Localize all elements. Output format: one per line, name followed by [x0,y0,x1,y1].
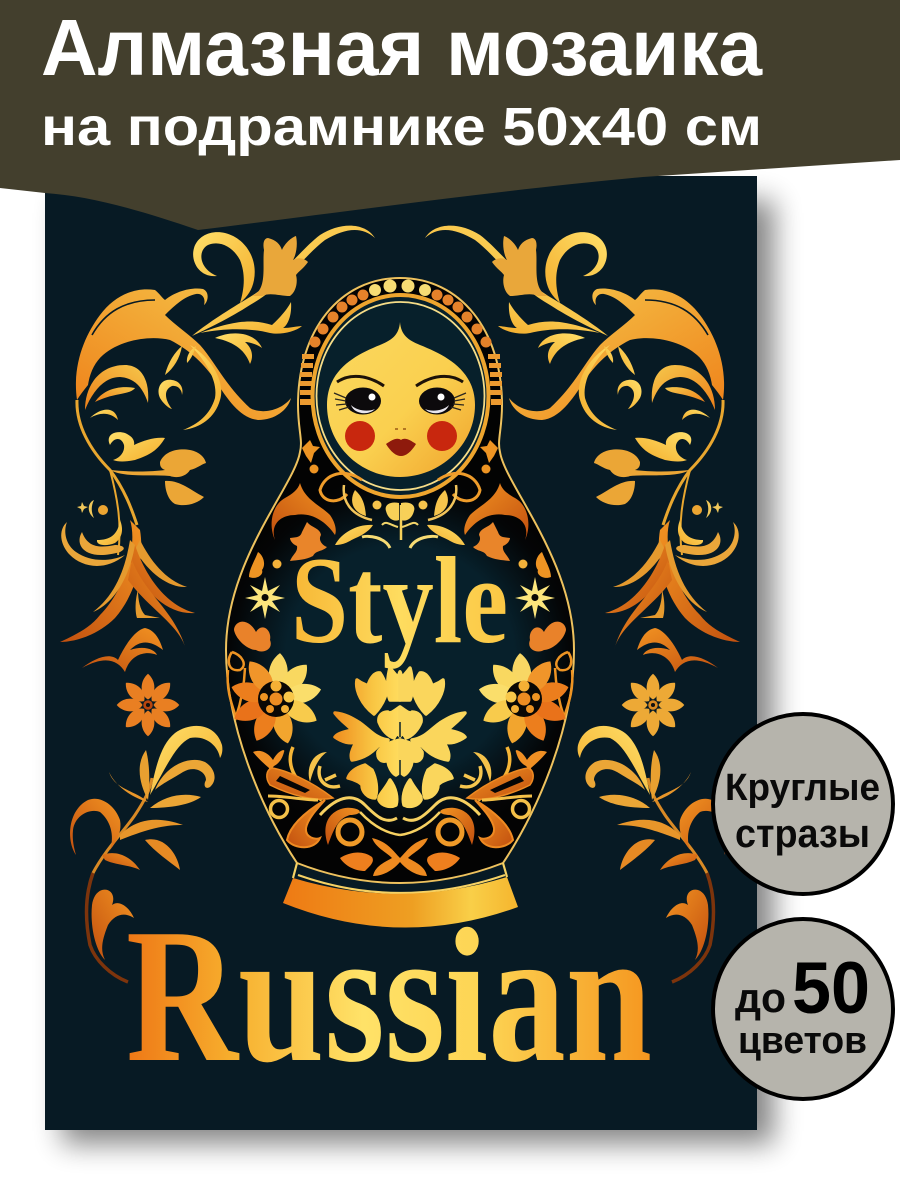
icon: left orange flower [117,674,179,736]
body ornament right half [400,440,572,876]
left eye [334,388,381,414]
badge: round rhinestones: стразы [735,812,870,856]
nose [395,428,406,430]
icon: right golden flower [622,674,684,736]
badge: up to 50 colours: до [735,974,786,1021]
badge: round rhinestones: Круглые [725,767,880,809]
left cheek [345,421,375,451]
lips [386,439,416,456]
hood band with beads [300,280,502,405]
matryoshka doll [226,278,574,928]
face [327,322,475,477]
badge: up to 50 colours: цветов [738,1020,867,1062]
inner hood rings [312,295,488,497]
right cheek [427,421,457,451]
base ring [283,877,518,928]
ornament: upper right gold scrollwork [425,226,740,672]
panel: painting canvas [45,176,757,1130]
centre flower seam [399,722,401,800]
banner header [0,0,900,230]
ornament: lower left gold branch [70,726,222,982]
badge: up to 50 colours [713,919,893,1099]
collar centre stem [400,505,402,540]
text: Style: Style [291,532,508,669]
title line 1: Алмазная мозаика [41,3,762,92]
hair oval [316,302,484,490]
centre flower right [400,668,465,806]
centre flower left [335,668,400,806]
eyebrows [337,376,463,386]
banner shape [0,0,900,230]
right eye [419,388,466,414]
canvas drop shadow [62,200,774,1144]
text: Russian: Russian [126,889,652,1102]
doll body silhouette [226,278,574,883]
ornament: upper left gold scrollwork [60,226,375,672]
badge: round rhinestones [713,714,893,894]
base rim lines [293,863,507,893]
body ornament left half [228,440,400,876]
ornament: lower right gold branch [578,726,730,982]
badge: up to 50 colours: 50 [792,948,870,1029]
title line 2: на подрамнике 50х40 см [41,97,762,157]
